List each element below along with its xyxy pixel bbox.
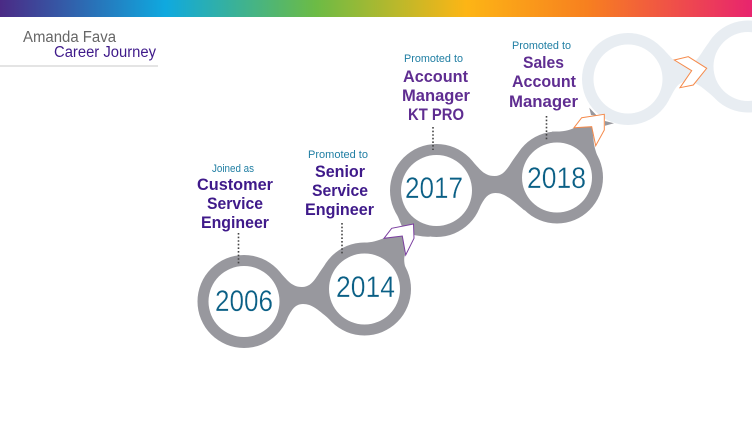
label: Customer Service Engineer: Engineer <box>201 213 269 232</box>
label: Senior Service Engineer: Promoted to <box>308 149 368 161</box>
milestone 2017 <box>390 144 483 237</box>
milestone 2018: 2018 <box>527 162 586 195</box>
label: Sales Account Manager <box>509 40 578 111</box>
dotted leader lines <box>238 116 546 265</box>
label: Sales Account Manager: Account <box>512 72 576 91</box>
label: Account Manager KT PRO: Account <box>403 67 468 86</box>
label: Senior Service Engineer: Service <box>312 181 368 200</box>
milestone 2006 <box>198 255 290 348</box>
future path: light rings <box>582 20 752 125</box>
label: Account Manager KT PRO <box>402 53 470 124</box>
header block: Amanda Fava <box>23 29 116 46</box>
milestone 2014 <box>318 242 411 336</box>
label: Senior Service Engineer <box>305 149 374 219</box>
label: Sales Account Manager: Promoted to <box>512 40 571 52</box>
milestone 2014: 2014 <box>336 271 395 304</box>
header block: Career Journey <box>54 44 156 61</box>
milestone 2018 <box>511 132 603 224</box>
label: Account Manager KT PRO: KT PRO <box>408 105 464 124</box>
grey timeline connectors and spurs <box>277 108 614 322</box>
label: Sales Account Manager: Sales <box>523 53 564 72</box>
arrow: purple step <box>384 224 414 255</box>
top rainbow bar <box>0 0 752 17</box>
label: Customer Service Engineer: Joined as <box>212 163 254 175</box>
label: Customer Service Engineer: Customer <box>197 175 273 194</box>
arrow: orange step <box>574 114 604 146</box>
header block <box>0 29 158 66</box>
label: Account Manager KT PRO: Manager <box>402 86 470 105</box>
label: Senior Service Engineer: Senior <box>315 162 365 181</box>
label: Customer Service Engineer <box>197 163 273 232</box>
label: Account Manager KT PRO: Promoted to <box>404 53 463 65</box>
label: Customer Service Engineer: Service <box>207 194 263 213</box>
label: Senior Service Engineer: Engineer <box>305 200 374 219</box>
milestone 2006: 2006 <box>215 285 273 318</box>
milestone 2017: 2017 <box>405 172 463 205</box>
arrow: orange chevron <box>674 57 707 88</box>
label: Sales Account Manager: Manager <box>509 92 578 111</box>
